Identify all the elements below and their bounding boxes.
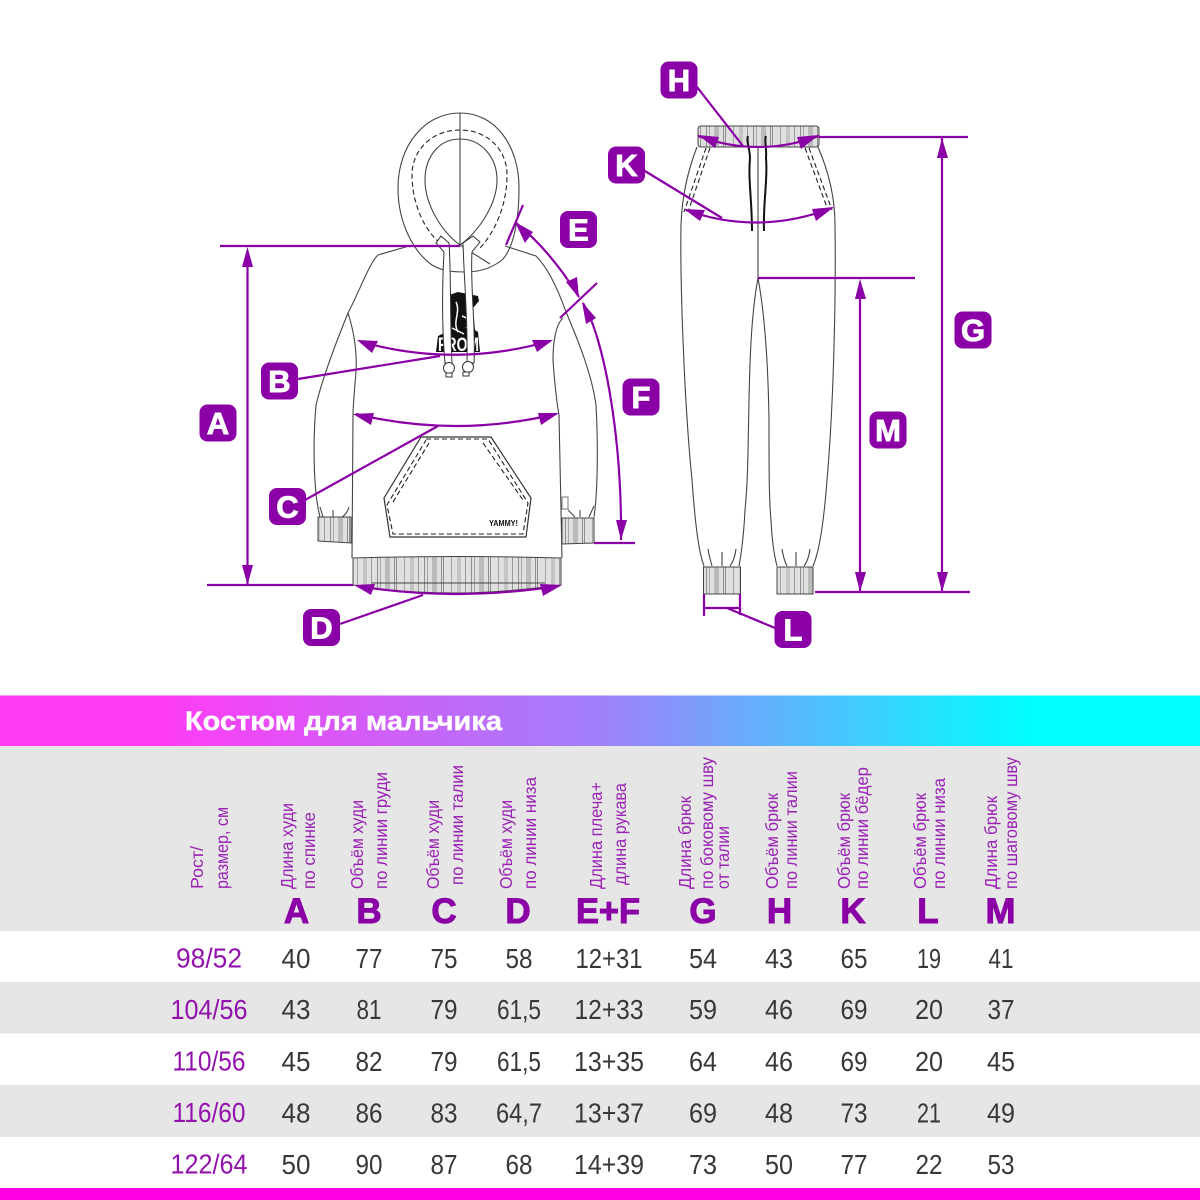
row 104/56: 43 bbox=[282, 994, 310, 1025]
row 116/60: 64,7 bbox=[496, 1098, 542, 1128]
row 116/60: 116/60 bbox=[172, 1097, 246, 1128]
row 104/56: 81 bbox=[356, 994, 382, 1025]
measure C bbox=[305, 413, 559, 500]
pant pockets bbox=[684, 148, 832, 212]
row 110/56: 61,5 bbox=[497, 1046, 541, 1077]
row 116/60: 83 bbox=[430, 1098, 458, 1128]
row 104/56: 61,5 bbox=[497, 994, 541, 1025]
badge G: G bbox=[961, 313, 985, 348]
badge A: A bbox=[207, 406, 229, 441]
row 116/60: 73 bbox=[840, 1098, 868, 1128]
badge L: L bbox=[784, 612, 802, 648]
row 98/52: 75 bbox=[430, 943, 458, 974]
row 122/64: 50 bbox=[765, 1149, 793, 1180]
row 110/56: 20 bbox=[915, 1046, 943, 1077]
chest print: FROM bbox=[438, 335, 479, 356]
row 110/56: 79 bbox=[430, 1046, 458, 1077]
column letters: H bbox=[767, 892, 792, 931]
row 122/64: 90 bbox=[356, 1149, 382, 1180]
row 122/64 bbox=[170, 1148, 1014, 1180]
badge K: K bbox=[615, 148, 638, 183]
row 110/56: 45 bbox=[282, 1046, 310, 1077]
row 98/52: 98/52 bbox=[176, 942, 242, 974]
badge C: C bbox=[276, 490, 299, 524]
pant drawstrings bbox=[747, 136, 766, 231]
rotated column labels: Длина брюк bbox=[675, 796, 695, 889]
row 98/52: 41 bbox=[988, 943, 1014, 974]
row 104/56 bbox=[170, 994, 1014, 1025]
rotated column labels: по спинке bbox=[299, 812, 319, 889]
rotated column labels: по линии груди bbox=[371, 772, 391, 889]
row 110/56: 110/56 bbox=[172, 1046, 246, 1076]
rotated column labels: по боковому шву bbox=[697, 757, 717, 889]
row 116/60: 49 bbox=[987, 1098, 1015, 1128]
row 110/56: 46 bbox=[765, 1046, 793, 1077]
hood bbox=[398, 113, 519, 272]
row 104/56: 20 bbox=[915, 994, 943, 1025]
row 98/52: 12+31 bbox=[576, 943, 642, 974]
row 104/56: 69 bbox=[840, 994, 868, 1025]
column letters: C bbox=[431, 892, 457, 931]
row 104/56: 79 bbox=[430, 994, 458, 1025]
row 98/52: 54 bbox=[689, 943, 717, 974]
measure L bbox=[704, 594, 775, 628]
column letters: G bbox=[689, 892, 717, 931]
column letters: K bbox=[840, 892, 866, 931]
row 122/64: 68 bbox=[506, 1149, 532, 1180]
badge D bbox=[303, 609, 340, 646]
pocket: YAMMY! bbox=[489, 519, 518, 528]
row 110/56: 13+35 bbox=[574, 1046, 644, 1077]
measure D bbox=[340, 584, 562, 624]
body outline bbox=[314, 246, 597, 558]
rotated column labels: по шаговому шву bbox=[1001, 757, 1021, 889]
rotated column labels: Объём брюк bbox=[910, 793, 930, 889]
row 122/64: 87 bbox=[430, 1149, 458, 1180]
rotated column labels: размер, см bbox=[212, 807, 232, 889]
rotated column labels: Объём худи bbox=[347, 800, 367, 889]
row 104/56: 104/56 bbox=[170, 994, 248, 1025]
pants drawing bbox=[681, 126, 835, 594]
row 98/52: 43 bbox=[765, 943, 793, 974]
drawstrings bbox=[436, 236, 480, 377]
column letters: D bbox=[505, 892, 531, 931]
rotated column labels: по линии низа bbox=[929, 778, 949, 889]
row 116/60: 48 bbox=[765, 1098, 793, 1128]
row 110/56: 64 bbox=[689, 1046, 717, 1077]
measure K bbox=[640, 168, 834, 223]
row 98/52: 77 bbox=[356, 943, 382, 974]
measure G bbox=[815, 137, 970, 592]
row 98/52: 40 bbox=[282, 943, 310, 974]
badge E: E bbox=[568, 212, 589, 248]
row 116/60: 86 bbox=[356, 1098, 382, 1128]
title bar: Костюм для мальчика bbox=[185, 706, 503, 736]
pocket bbox=[384, 437, 531, 537]
rotated column labels: Длина плеча+ bbox=[586, 782, 606, 889]
badge G bbox=[954, 312, 992, 348]
row 110/56 bbox=[172, 1046, 1015, 1077]
row 98/52: 19 bbox=[917, 943, 941, 974]
badge M bbox=[870, 412, 906, 448]
badge B: B bbox=[268, 364, 291, 399]
measure H bbox=[690, 78, 819, 149]
badge H bbox=[660, 62, 698, 98]
rotated column labels: Длина брюк bbox=[981, 796, 1001, 889]
row 110/56: 45 bbox=[987, 1046, 1015, 1077]
badge H: H bbox=[668, 63, 690, 98]
badge A bbox=[200, 404, 236, 442]
measure M bbox=[758, 278, 915, 592]
badge F bbox=[622, 378, 660, 416]
row 98/52: 58 bbox=[506, 943, 532, 974]
badge C bbox=[269, 488, 306, 525]
chest print bbox=[436, 292, 480, 356]
row 122/64: 77 bbox=[840, 1149, 868, 1180]
rotated column labels: Объём худи bbox=[496, 800, 516, 889]
badge B bbox=[261, 362, 298, 400]
measure F bbox=[582, 302, 635, 543]
row 122/64: 53 bbox=[988, 1149, 1014, 1180]
rotated column labels: по линии талии bbox=[781, 771, 801, 889]
hoodie drawing bbox=[314, 113, 597, 593]
pants outline bbox=[681, 147, 835, 566]
cuffs and hem bbox=[318, 497, 594, 593]
measure B bbox=[298, 340, 553, 379]
row 116/60 bbox=[172, 1097, 1015, 1128]
row 122/64: 14+39 bbox=[574, 1149, 644, 1180]
row 116/60: 13+37 bbox=[574, 1098, 644, 1128]
row 98/52 bbox=[176, 942, 1014, 974]
rotated column labels: по линии низа bbox=[520, 777, 540, 889]
title bar bbox=[0, 696, 1200, 746]
badge F: F bbox=[632, 380, 650, 415]
row 104/56: 37 bbox=[988, 994, 1014, 1025]
rotated column labels: по линии бёдер bbox=[852, 767, 872, 889]
row 122/64: 122/64 bbox=[170, 1148, 248, 1180]
row 110/56: 82 bbox=[356, 1046, 382, 1077]
row 110/56: 69 bbox=[840, 1046, 868, 1077]
row 116/60: 69 bbox=[689, 1098, 717, 1128]
column letters: M bbox=[986, 892, 1016, 931]
leg cuffs bbox=[704, 549, 813, 594]
badge D: D bbox=[310, 610, 333, 646]
rotated column labels: Объём брюк bbox=[834, 793, 854, 889]
column letters: B bbox=[356, 892, 382, 931]
waistband bbox=[698, 126, 819, 147]
badge K bbox=[608, 146, 645, 184]
rotated column labels: от талии bbox=[713, 826, 733, 889]
badge E bbox=[560, 211, 597, 248]
row 122/64: 73 bbox=[689, 1149, 717, 1180]
row 98/52: 65 bbox=[840, 943, 868, 974]
row 122/64: 50 bbox=[282, 1149, 310, 1180]
rotated column labels: Объём худи bbox=[423, 800, 443, 889]
badge M: M bbox=[875, 413, 901, 448]
row 104/56: 12+33 bbox=[574, 994, 644, 1025]
rotated column labels: длина рукава bbox=[610, 783, 630, 885]
column letters: A bbox=[284, 892, 309, 931]
row 104/56: 59 bbox=[689, 994, 717, 1025]
row 116/60: 48 bbox=[282, 1098, 310, 1128]
measurement lines bbox=[207, 78, 970, 628]
bottom bar bbox=[0, 1188, 1200, 1200]
row 104/56: 46 bbox=[765, 994, 793, 1025]
measure E bbox=[506, 205, 597, 318]
column letters: L bbox=[917, 892, 939, 931]
rotated column labels: Длина худи bbox=[277, 803, 297, 889]
column letters: E+F bbox=[576, 892, 640, 931]
rotated column labels: по линии талии bbox=[447, 765, 467, 885]
rotated column labels: Объём брюк bbox=[762, 793, 782, 889]
rotated column labels bbox=[187, 757, 1021, 889]
table header bbox=[0, 746, 1200, 931]
table rows bbox=[0, 942, 1200, 1180]
badge L bbox=[774, 611, 812, 648]
row 116/60: 21 bbox=[917, 1098, 941, 1128]
rotated column labels: Рост/ bbox=[187, 846, 207, 889]
measure A bbox=[207, 246, 460, 585]
row 122/64: 22 bbox=[916, 1149, 942, 1180]
column letters bbox=[284, 892, 1016, 931]
